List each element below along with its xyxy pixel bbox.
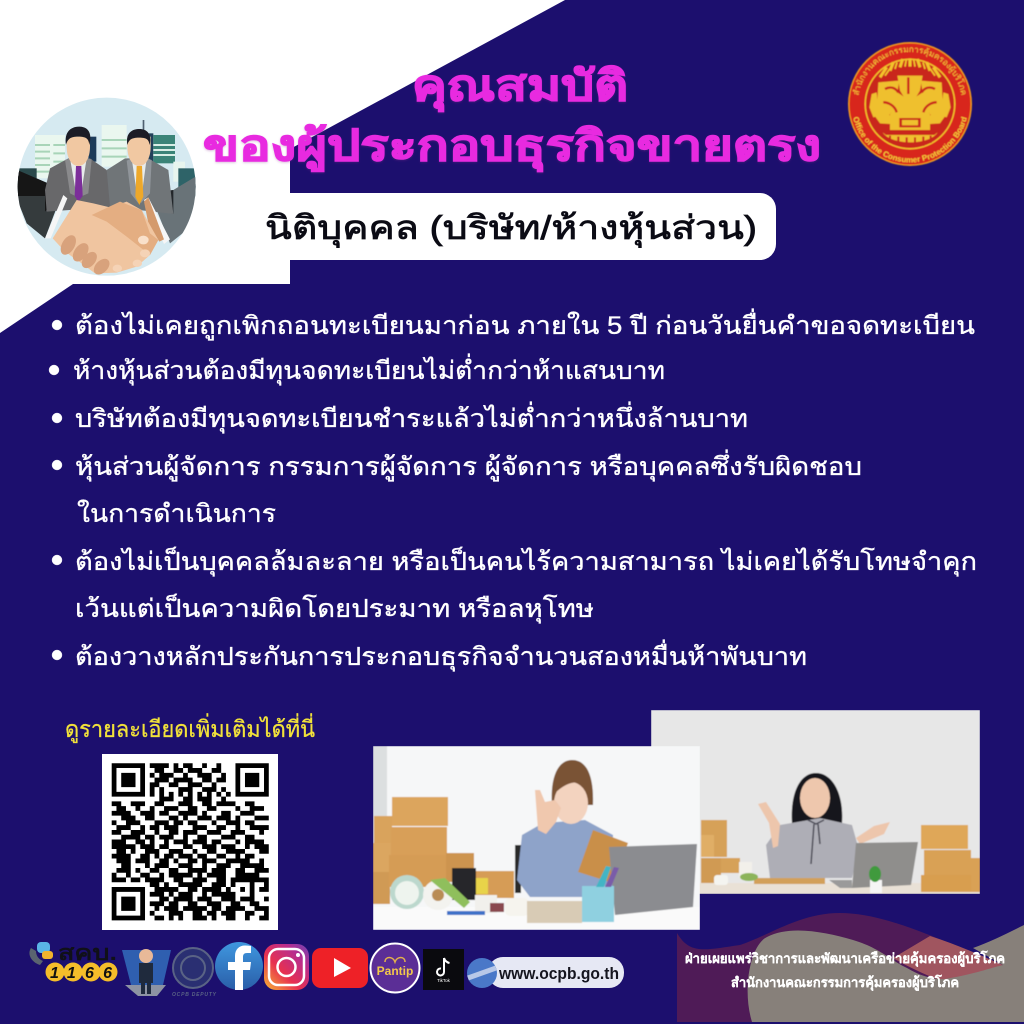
title: [203, 62, 821, 172]
icon: hotline 1166: [29, 942, 118, 982]
subtitle pill: [250, 193, 776, 260]
title: คุณสมบัติ: [412, 62, 628, 112]
photo: woman with parcel, front: [373, 746, 700, 930]
title: ของผู้ประกอบธุรกิจขายตรง: [203, 122, 821, 172]
icon: tiktok: [423, 949, 464, 990]
icon: cartoon officer: [122, 949, 171, 996]
social icons row: [29, 942, 624, 998]
icon: tiktok: TikTok: [437, 978, 451, 983]
bullet 4: หุ้นส่วนผู้จัดการ กรรมการผู้จัดการ ผู้จัดการ หรือบุคคลซึ่งรับผิดชอบ: [75, 449, 862, 482]
icon: hotline 1166: สคบ.: [58, 942, 117, 965]
icon: youtube: [312, 948, 368, 988]
footer text: department credit: [685, 949, 1005, 991]
footer text: department credit: ฝ่ายเผยแพร่วิชาการและพัฒนาเครือข่ายคุ้มครองผู้บริโภค: [685, 949, 1005, 967]
bullet 1: ต้องไม่เคยถูกเพิกถอนทะเบียนมาก่อน ภายใน 5 ปี ก่อนวันยื่นคำขอจดทะเบียน: [75, 308, 975, 341]
icon: businessmen handshake: [17, 98, 197, 278]
bullet 4: ในการดำเนินการ: [77, 499, 276, 528]
icon: OCPB round logo: [172, 948, 217, 998]
subtitle pill: นิติบุคคล (บริษัท/ห้างหุ้นส่วน): [265, 209, 757, 248]
logo: Office of the Consumer Protection Board seal: Office of the Consumer Protection Board: [852, 116, 968, 164]
QR heading: ดูรายละเอียดเพิ่มเติมได้ที่นี่: [65, 713, 315, 743]
icon: facebook: [215, 942, 263, 990]
bullet list: [49, 308, 977, 672]
logo: Office of the Consumer Protection Board seal: [847, 41, 973, 167]
QR code: [102, 754, 278, 930]
logo: Office of the Consumer Protection Board seal: สำนักงานคณะกรรมการคุ้มครองผู้บริโภค: [852, 46, 966, 96]
icon: pantip: [370, 944, 420, 992]
bullet 4: [52, 449, 862, 528]
footer shape: decorative waves: [677, 913, 1024, 1022]
website pill: www.ocpb.go.th: [498, 964, 619, 983]
bullet 3: บริษัทต้องมีทุนจดทะเบียนชำระแล้วไม่ต่ำกว่าหนึ่งล้านบาท: [75, 401, 748, 434]
bullet 5: เว้นแต่เป็นความผิดโดยประมาท หรือลหุโทษ: [75, 593, 594, 624]
icon: hotline 1166: 1166: [50, 965, 112, 982]
icon: OCPB round logo: OCPB DEPUTY: [172, 992, 217, 998]
icon: pantip: Pantip: [377, 964, 413, 978]
footer text: department credit: สำนักงานคณะกรรมการคุ้มครองผู้บริโภค: [731, 973, 959, 991]
bullet 2: ห้างหุ้นส่วนต้องมีทุนจดทะเบียนไม่ต่ำกว่าห้าแสนบาท: [73, 353, 665, 386]
photo: woman with laptop, right: [651, 710, 980, 894]
website pill: [467, 957, 624, 988]
bullet 6: ต้องวางหลักประกันการประกอบธุรกิจจำนวนสองหมื่นห้าพันบาท: [75, 639, 807, 672]
bullet 5: [52, 546, 977, 624]
bullet 5: ต้องไม่เป็นบุคคลล้มละลาย หรือเป็นคนไร้ความสามารถ ไม่เคยได้รับโทษจำคุก: [75, 546, 977, 577]
icon: instagram: [264, 944, 309, 990]
